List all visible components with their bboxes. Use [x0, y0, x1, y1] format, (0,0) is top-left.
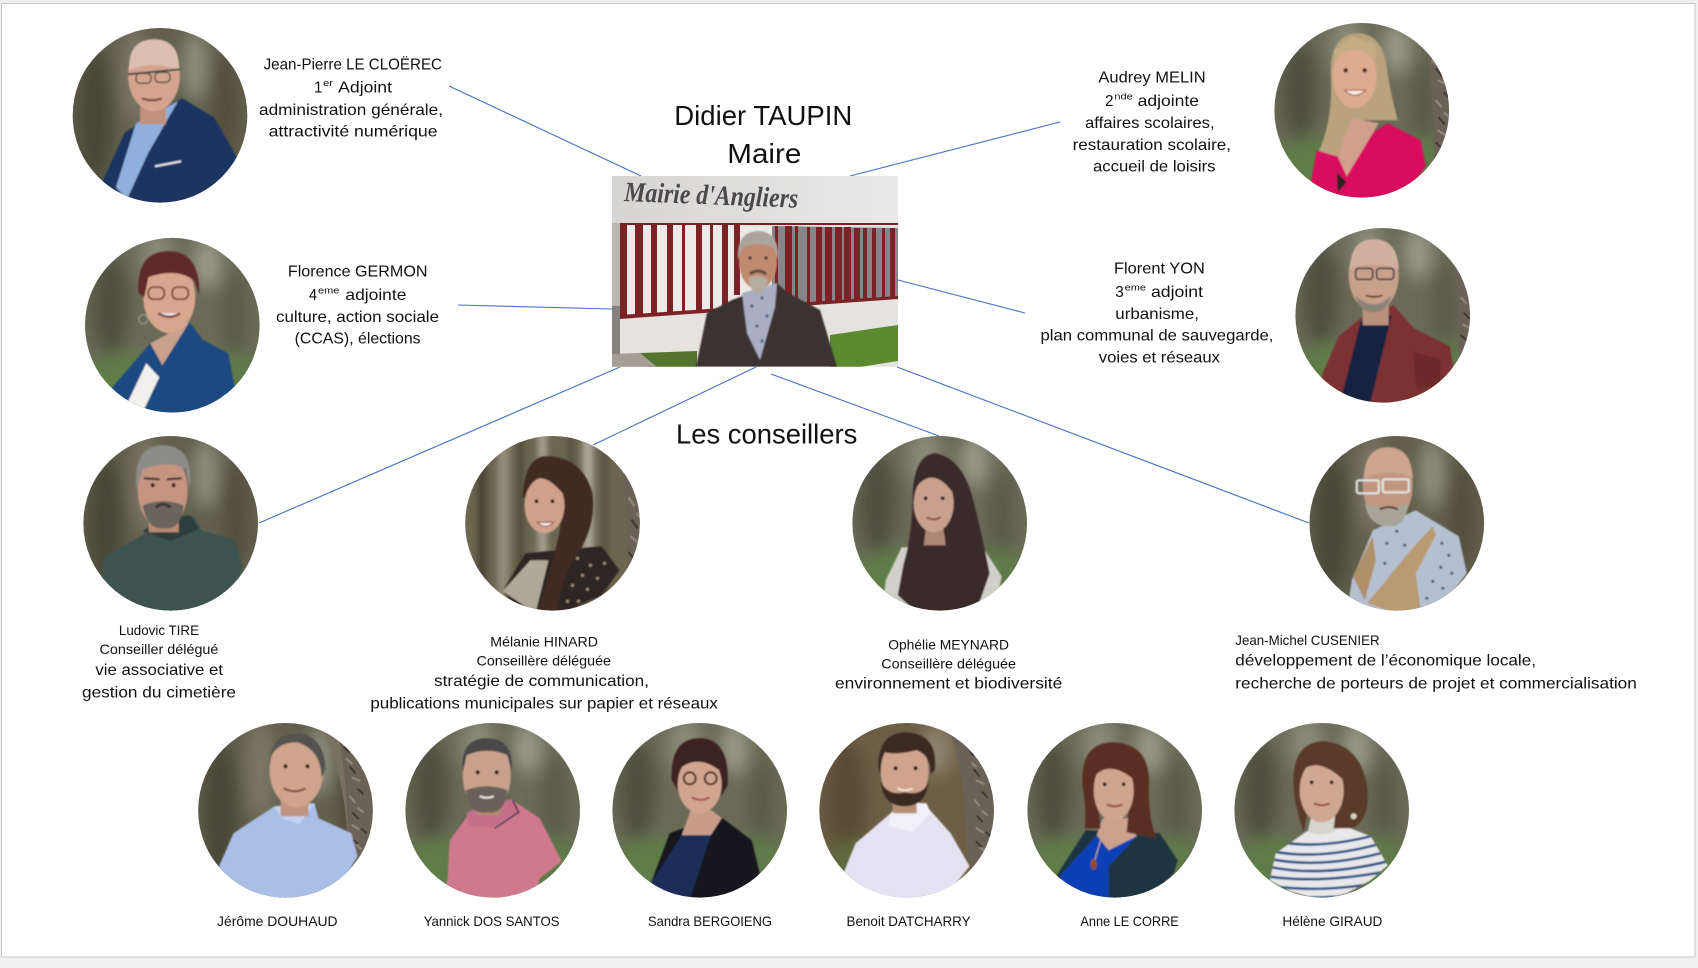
caption: Jean-Pierre LE CLOËREC: administration générale, [259, 102, 443, 119]
caption: Audrey MELIN: nde [1114, 91, 1133, 102]
caption: Ludovic TIRE: vie associative et [95, 662, 224, 679]
caption: Florent YON: 3 [1115, 284, 1124, 301]
caption: Florent YON: adjoint [1151, 284, 1204, 301]
caption: Mélanie HINARD: stratégie de communication, [434, 673, 649, 690]
caption: Audrey MELIN: 2 [1105, 93, 1114, 110]
portrait: Sandra BERGOIENG [610, 715, 790, 900]
portrait: Anne LE CORRE [1025, 715, 1205, 900]
caption: Audrey MELIN: accueil de loisirs [1093, 159, 1216, 176]
caption: Jean-Pierre LE CLOËREC: Jean-Pierre LE CLOËREC [264, 55, 442, 73]
caption: Ludovic TIRE [82, 622, 236, 702]
portrait: Yannick DOS SANTOS [403, 715, 583, 900]
caption: Ophélie MEYNARD [835, 636, 1062, 693]
portrait: Audrey MELIN [1274, 23, 1449, 198]
person: Audrey MELIN [1073, 15, 1459, 200]
portrait: Jean-Pierre LE CLOËREC [70, 25, 250, 211]
portrait: Jean-Michel CUSENIER [1307, 433, 1487, 619]
connector lines from the mayor to team members [259, 86, 1309, 523]
caption: Florence GERMON: 4 [309, 287, 317, 304]
caption: Mélanie HINARD: Mélanie HINARD [490, 633, 598, 649]
person: Jean-Pierre LE CLOËREC [70, 25, 443, 211]
caption: Jérôme DOUHAUD: Jérôme DOUHAUD [217, 913, 338, 929]
caption: Audrey MELIN: affaires scolaires, [1085, 115, 1215, 132]
photo: mayor in front of the town hall [612, 176, 898, 367]
caption: Florence GERMON: (CCAS), élections [295, 331, 421, 348]
photo: mayor in front of the town hall: Mairie d'Angliers [623, 177, 799, 215]
portrait: Mélanie HINARD [465, 436, 640, 611]
person: Florent YON [1040, 220, 1484, 405]
caption: Benoit DATCHARRY: Benoit DATCHARRY [846, 913, 971, 929]
caption: Ophélie MEYNARD: environnement et biodiversité [835, 676, 1062, 693]
person: Anne LE CORRE [1025, 715, 1205, 929]
portrait: Hélène GIRAUD [1232, 715, 1412, 900]
portrait: Florent YON [1295, 228, 1470, 403]
caption: Ophélie MEYNARD: Ophélie MEYNARD [888, 636, 1009, 652]
caption: Jean-Michel CUSENIER: recherche de porteurs de projet et commercialisation [1235, 676, 1637, 693]
caption: Jean-Pierre LE CLOËREC: Adjoint [338, 80, 393, 97]
person: Ludovic TIRE [81, 433, 261, 702]
caption: Ludovic TIRE: Ludovic TIRE [119, 622, 199, 638]
caption: Florent YON [1040, 261, 1273, 367]
caption: Jean-Michel CUSENIER [1235, 632, 1637, 693]
person: Sandra BERGOIENG [610, 715, 790, 929]
caption: Florence GERMON: eme [318, 285, 339, 296]
person: Yannick DOS SANTOS [403, 715, 583, 929]
caption: Florence GERMON: Florence GERMON [288, 264, 428, 281]
caption: Florence GERMON: culture, action sociale [276, 309, 439, 326]
caption: Audrey MELIN: Audrey MELIN [1098, 70, 1206, 87]
portrait: Ludovic TIRE [81, 433, 261, 619]
person: Jérôme DOUHAUD [196, 720, 380, 929]
person: Benoit DATCHARRY [817, 720, 997, 929]
caption: Florent YON: Florent YON [1114, 261, 1205, 278]
caption: Florent YON: plan communal de sauvegarde, [1040, 328, 1273, 345]
caption: Florence GERMON: adjointe [345, 287, 407, 304]
portrait: Ophélie MEYNARD [850, 428, 1030, 613]
caption: Florence GERMON [276, 264, 439, 348]
caption: Anne LE CORRE: Anne LE CORRE [1080, 913, 1179, 929]
caption: Ludovic TIRE: gestion du cimetière [82, 685, 236, 702]
caption: Audrey MELIN: restauration scolaire, [1073, 137, 1231, 154]
caption: Jean-Pierre LE CLOËREC [259, 55, 443, 141]
caption: Jean-Michel CUSENIER: Jean-Michel CUSENIER [1235, 632, 1380, 648]
caption: Audrey MELIN: adjointe [1138, 93, 1199, 110]
caption: Hélène GIRAUD: Hélène GIRAUD [1282, 913, 1382, 929]
person: Florence GERMON [82, 230, 439, 415]
caption: Florent YON: voies et réseaux [1099, 350, 1220, 367]
caption: Mélanie HINARD: Conseillère déléguée [476, 652, 611, 668]
title: mayor name and role: Maire [727, 138, 801, 169]
person: Ophélie MEYNARD [835, 428, 1062, 693]
caption: Ludovic TIRE: Conseiller délégué [100, 641, 219, 657]
title: mayor name and role [674, 100, 852, 169]
caption: Audrey MELIN [1073, 70, 1231, 176]
heading: Les conseillers: Les conseillers [676, 418, 857, 449]
caption: Florent YON: urbanisme, [1115, 306, 1199, 323]
person: Mélanie HINARD [370, 413, 718, 713]
caption: Yannick DOS SANTOS: Yannick DOS SANTOS [424, 913, 560, 929]
caption: Jean-Michel CUSENIER: développement de l’économique locale, [1235, 652, 1536, 669]
caption: Florent YON: eme [1125, 282, 1146, 293]
portrait: Jérôme DOUHAUD [198, 723, 373, 898]
caption: Mélanie HINARD [370, 633, 718, 713]
caption: Jean-Pierre LE CLOËREC: attractivité numérique [269, 124, 438, 141]
caption: Mélanie HINARD: publications municipales sur papier et réseaux [370, 696, 718, 713]
portrait: Benoit DATCHARRY [817, 720, 997, 900]
portrait: Florence GERMON [82, 230, 262, 415]
caption: Sandra BERGOIENG: Sandra BERGOIENG [648, 913, 772, 929]
person: Jean-Michel CUSENIER [1235, 433, 1637, 693]
title: mayor name and role: Didier TAUPIN [674, 100, 852, 131]
person: Hélène GIRAUD [1232, 715, 1412, 929]
caption: Jean-Pierre LE CLOËREC: er [323, 78, 333, 89]
caption: Jean-Pierre LE CLOËREC: 1 [314, 80, 323, 97]
caption: Ophélie MEYNARD: Conseillère déléguée [881, 655, 1016, 671]
